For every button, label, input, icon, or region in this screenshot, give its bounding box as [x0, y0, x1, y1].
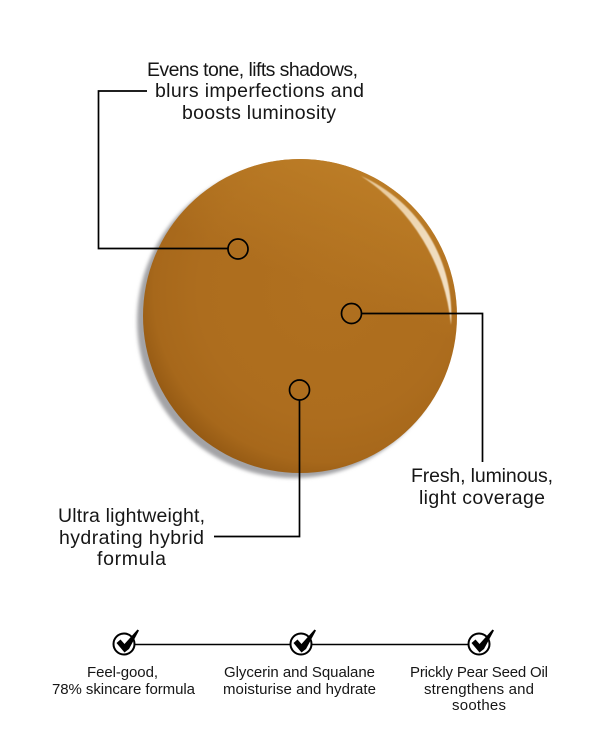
icon: check [290, 630, 316, 654]
callout: ultra lightweight: hydrating hybrid [59, 527, 204, 549]
callout: evens tone [98, 59, 364, 259]
benefit: prickly pear seed oil: Prickly Pear Seed Oil [410, 664, 548, 681]
callout: evens tone: boosts luminosity [182, 102, 336, 124]
benefit: glycerin and squalane [223, 630, 376, 698]
benefit: feel-good: 78% skincare formula [52, 681, 196, 698]
highlight on droplet [361, 176, 451, 325]
benefit: prickly pear seed oil: strengthens and [424, 681, 534, 698]
benefit: glycerin and squalane: Glycerin and Squalane [224, 664, 375, 681]
callout: ultra lightweight: Ultra lightweight, [58, 505, 205, 527]
icon: check [114, 630, 139, 654]
callout: evens tone: Evens tone, lifts shadows, [147, 59, 358, 81]
benefit: feel-good [52, 630, 196, 698]
icon: check [468, 630, 494, 654]
callout: evens tone: blurs imperfections and [155, 80, 364, 102]
droplet swatch [137, 159, 457, 478]
benefit: feel-good: Feel-good, [87, 664, 158, 681]
callout: ultra lightweight: formula [97, 548, 166, 570]
callout: fresh luminous [342, 304, 553, 509]
benefit: prickly pear seed oil [410, 630, 548, 714]
callout: ultra lightweight [58, 380, 310, 570]
benefit: prickly pear seed oil: soothes [452, 697, 506, 714]
connector line between benefits [125, 644, 480, 646]
benefit: glycerin and squalane: moisturise and hydrate [223, 681, 376, 698]
callout: fresh luminous: light coverage [419, 487, 545, 509]
callout: fresh luminous: Fresh, luminous, [411, 465, 553, 487]
